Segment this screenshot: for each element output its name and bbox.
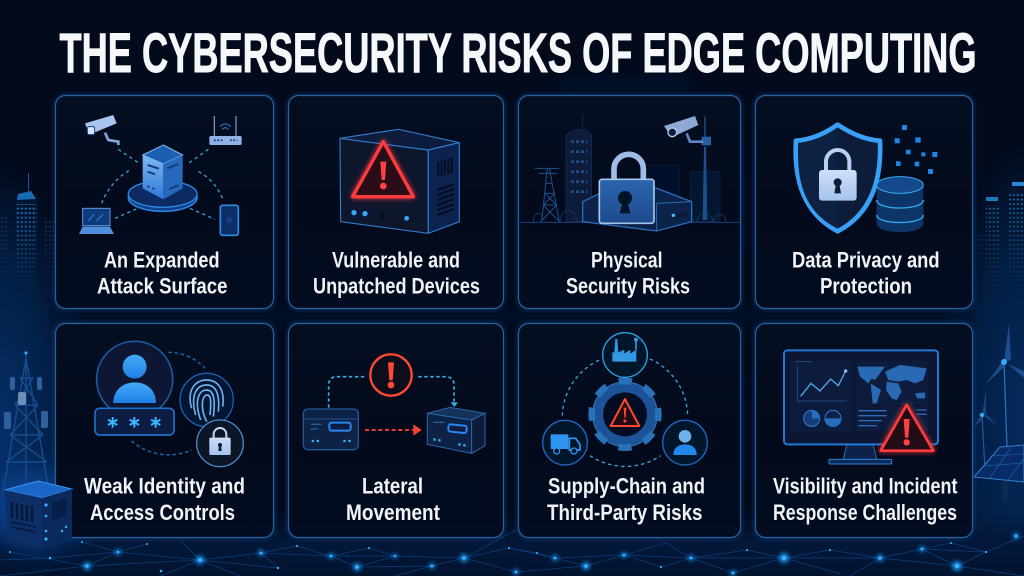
- heading: [547, 474, 705, 525]
- icon: lateral movement between two servers: [303, 354, 485, 453]
- heading: Visibility and Incident: [773, 474, 958, 498]
- heading: [97, 248, 228, 298]
- heading: [566, 248, 690, 298]
- heading: Attack Surface: [97, 274, 228, 298]
- heading: An Expanded: [104, 248, 220, 272]
- panel: data privacy and protection: [756, 96, 972, 308]
- heading: [792, 248, 940, 298]
- heading: Physical: [591, 248, 662, 272]
- heading: [84, 474, 245, 525]
- panel: vulnerable and unpatched devices: [288, 96, 504, 308]
- icon: monitor dashboard with red warning: [784, 350, 938, 464]
- heading: Protection: [820, 274, 912, 298]
- heading: Security Risks: [566, 274, 690, 298]
- heading: [773, 474, 958, 525]
- heading: Movement: [346, 500, 440, 525]
- heading: Data Privacy and: [792, 248, 940, 272]
- heading: Weak Identity and: [84, 474, 245, 498]
- background: right city skyline: [976, 182, 1024, 281]
- heading: [313, 248, 480, 298]
- card outer glow: [56, 96, 972, 538]
- background: glowing network floor: [0, 530, 1024, 576]
- heading: Lateral: [362, 474, 423, 498]
- heading: Third-Party Risks: [547, 500, 702, 525]
- panel: supply-chain and third-party risks: [518, 324, 740, 538]
- icon: server with red warning: [340, 129, 459, 233]
- panel: lateral movement: [288, 324, 504, 538]
- panel: weak identity and access controls: [56, 324, 274, 538]
- background: wind turbines: [974, 323, 1024, 470]
- icon: shield with padlock, database and data squares: [796, 125, 937, 232]
- background: solar panel: [974, 445, 1024, 501]
- icon: gear with supply-chain nodes: [543, 333, 707, 466]
- heading: [346, 474, 440, 525]
- heading: Access Controls: [90, 500, 235, 525]
- background: left city skyline: [0, 173, 54, 290]
- panel: physical security risks: [518, 96, 740, 308]
- icon: padlock on edge device with skyline: [518, 113, 740, 231]
- panel: an expanded attack surface: [56, 96, 274, 308]
- heading: Response Challenges: [773, 500, 957, 525]
- panel: visibility and incident response challenges: [756, 324, 972, 538]
- heading: Supply-Chain and: [548, 474, 705, 498]
- icon: user, password, fingerprint and lock: [95, 341, 243, 467]
- foreground: glowing edge server: [5, 481, 72, 549]
- heading: Vulnerable and: [332, 248, 460, 272]
- heading: Unpatched Devices: [313, 274, 480, 298]
- background: cell tower: [3, 351, 49, 492]
- icon: central server with connected devices: [79, 115, 242, 235]
